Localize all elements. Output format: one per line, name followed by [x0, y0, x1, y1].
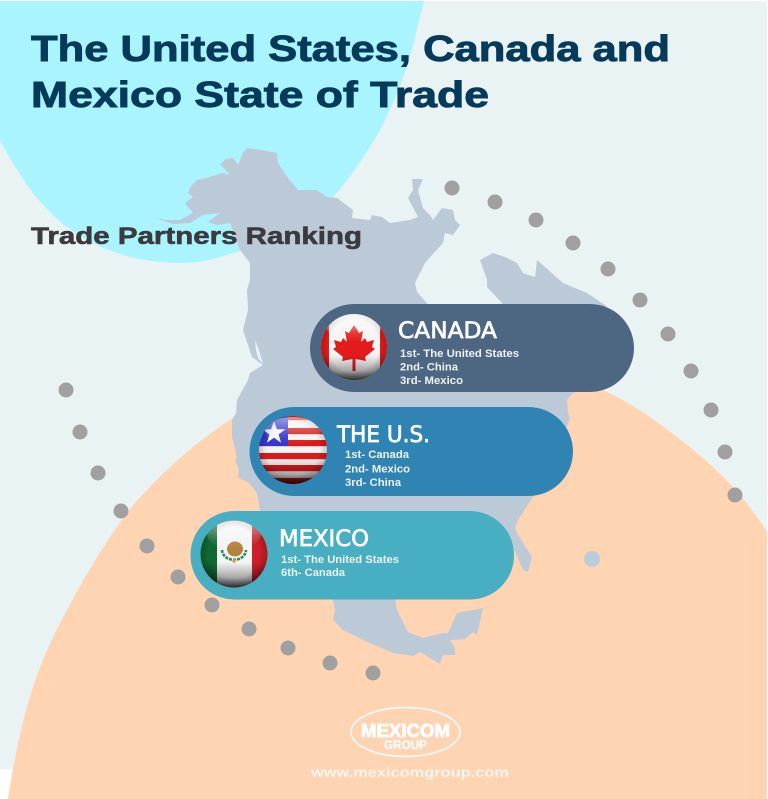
- logo: Mexicom Group: [351, 708, 460, 756]
- logo: Mexicom Group: GROUP: [384, 738, 427, 752]
- icon: Canada flag sphere: [320, 313, 389, 381]
- text: Canada partners: [400, 348, 519, 387]
- map of North America: [153, 148, 625, 664]
- heading: Canada: CANADA: [398, 319, 497, 344]
- logo: Mexicom Group: MEXICOM: [361, 721, 450, 741]
- text: U.S. partners: 1st- Canada: [345, 449, 410, 461]
- panel: The U.S.: [250, 407, 573, 496]
- dotted arc: lower left: [58, 382, 380, 680]
- peach background shape: [8, 360, 767, 799]
- text: Canada partners: 2nd- China: [400, 362, 459, 374]
- text: Canada partners: 3rd- Mexico: [400, 375, 463, 387]
- text: U.S. partners: 3rd- China: [345, 477, 402, 489]
- text: Mexico partners: 1st- The United States: [281, 554, 399, 566]
- dotted arc: upper right: [444, 180, 742, 502]
- text: Mexico partners: 6th- Canada: [281, 567, 346, 579]
- panel: Mexico: [190, 511, 514, 600]
- icon: Mexico flag sphere: [200, 520, 268, 588]
- title: [31, 28, 670, 115]
- subtitle: Trade Partners Ranking: [31, 223, 362, 250]
- panel: Canada: [310, 304, 634, 392]
- icon: U.S. flag sphere: [258, 414, 328, 485]
- text: Canada partners: 1st- The United States: [400, 348, 519, 360]
- text: Mexico partners: [281, 554, 399, 579]
- heading: The U.S.: THE U.S.: [336, 423, 430, 448]
- light blue dot: [584, 551, 600, 567]
- title: The United States, Canada and: [31, 28, 670, 69]
- website url: www.mexicomgroup.com: [310, 764, 509, 780]
- text: U.S. partners: [345, 449, 410, 489]
- text: U.S. partners: 2nd- Mexico: [345, 464, 410, 476]
- cyan background shape: [0, 1, 424, 263]
- heading: Mexico: MEXICO: [279, 527, 369, 552]
- title: Mexico State of Trade: [31, 74, 489, 115]
